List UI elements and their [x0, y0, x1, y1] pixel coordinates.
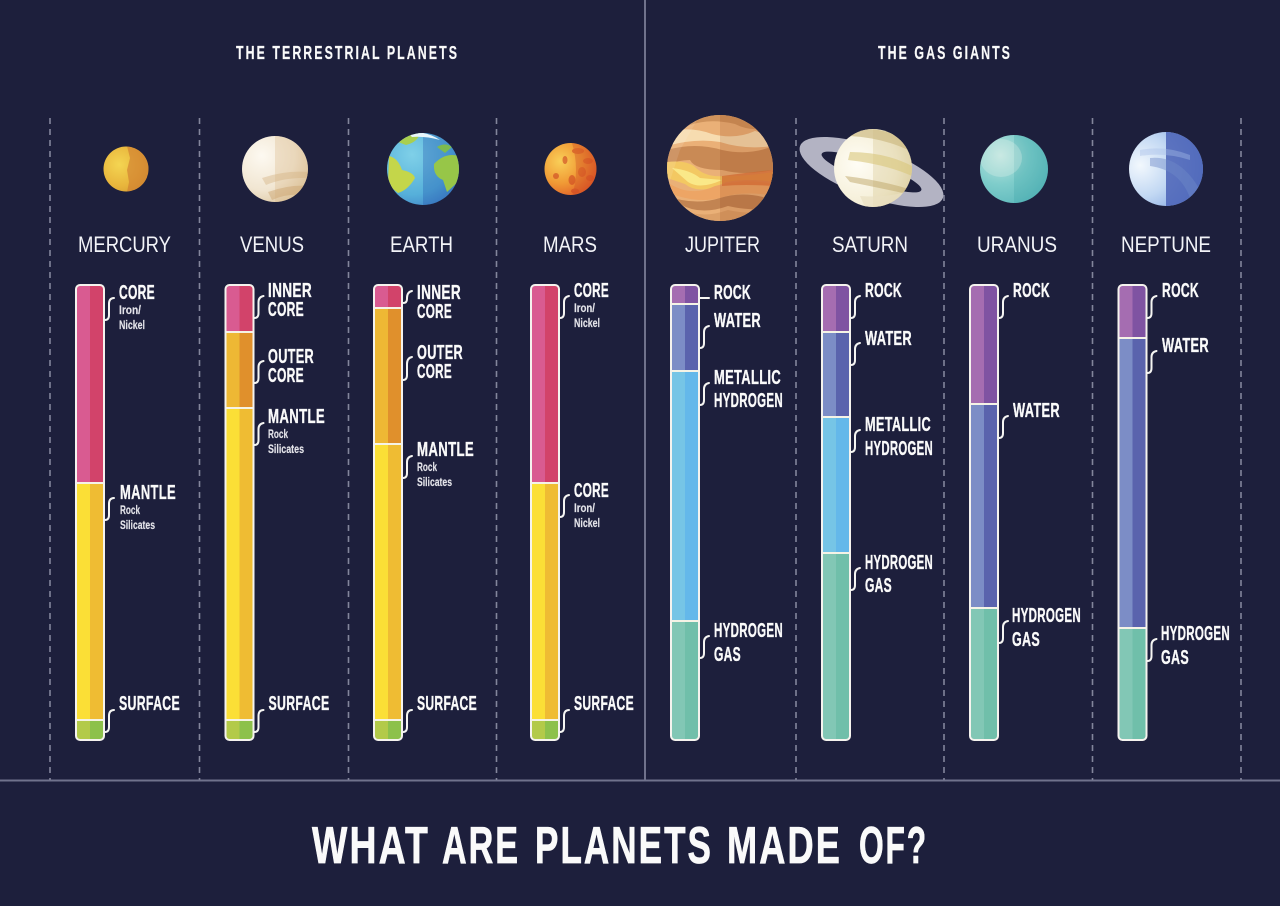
labels: mars: CORE: [574, 480, 609, 502]
labels: saturn: [851, 280, 933, 597]
labels: jupiter: GAS: [714, 644, 741, 666]
labels: saturn: METALLIC: [865, 414, 931, 436]
bar: mars: [530, 284, 560, 741]
labels: jupiter: WATER: [714, 310, 761, 332]
planet name: uranus: URANUS: [977, 232, 1057, 257]
labels: venus: INNER: [268, 280, 312, 302]
labels: mars: SURFACE: [574, 693, 634, 715]
planet name: neptune: NEPTUNE: [1121, 232, 1211, 257]
planet name: mercury: MERCURY: [78, 232, 171, 257]
labels: earth: Rock: [417, 462, 437, 474]
bar: jupiter: [670, 284, 700, 741]
labels: venus: [254, 280, 330, 732]
planet name: saturn: SATURN: [832, 232, 908, 257]
planet name: earth: EARTH: [390, 232, 453, 257]
planet name: mars: MARS: [543, 232, 597, 257]
labels: neptune: GAS: [1161, 647, 1189, 669]
icon: uranus: [980, 135, 1048, 203]
labels: jupiter: [700, 282, 783, 666]
labels: jupiter: ROCK: [714, 282, 751, 304]
labels: saturn: ROCK: [865, 280, 902, 302]
labels: earth: OUTER: [417, 342, 463, 364]
bar: uranus: [969, 284, 999, 741]
labels: mercury: Iron/: [119, 305, 142, 317]
labels: jupiter: HYDROGEN: [714, 620, 783, 642]
icon: earth: [387, 132, 460, 206]
labels: mars: Nickel: [574, 318, 600, 330]
labels: mars: CORE: [574, 280, 609, 302]
labels: mercury: Silicates: [120, 520, 155, 532]
labels: mercury: Nickel: [119, 320, 145, 332]
labels: neptune: [1148, 280, 1230, 669]
labels: earth: [403, 282, 477, 732]
title: WHAT: [312, 817, 430, 875]
labels: uranus: ROCK: [1013, 280, 1050, 302]
icon: saturn: [800, 129, 944, 207]
labels: mars: Iron/: [574, 303, 596, 315]
title: OF?: [859, 817, 928, 875]
labels: venus: Silicates: [268, 444, 304, 456]
bar: neptune: [1118, 284, 1148, 741]
labels: earth: MANTLE: [417, 439, 474, 461]
labels: mars: Nickel: [574, 518, 600, 530]
labels: neptune: WATER: [1162, 335, 1209, 357]
labels: venus: MANTLE: [268, 406, 325, 428]
bar: mercury: [75, 284, 105, 741]
labels: venus: OUTER: [268, 346, 314, 368]
planet name: venus: VENUS: [240, 232, 304, 257]
labels: saturn: HYDROGEN: [865, 552, 933, 574]
labels: mars: Iron/: [574, 503, 596, 515]
labels: uranus: HYDROGEN: [1012, 605, 1081, 627]
frame divider: vertical: [644, 0, 646, 780]
labels: mercury: [105, 282, 180, 732]
labels: mercury: MANTLE: [120, 482, 176, 504]
frame divider: horizontal: [0, 780, 1280, 782]
labels: venus: SURFACE: [268, 693, 330, 715]
labels: mars: [560, 280, 634, 732]
planet name: jupiter: JUPITER: [685, 232, 760, 257]
labels: earth: CORE: [417, 361, 452, 383]
icon: neptune: [1129, 132, 1203, 206]
labels: uranus: WATER: [1013, 400, 1060, 422]
labels: uranus: [999, 280, 1081, 651]
labels: saturn: HYDROGEN: [865, 438, 933, 460]
title: ARE: [442, 817, 520, 875]
bar: saturn: [821, 284, 851, 741]
labels: uranus: GAS: [1012, 629, 1040, 651]
labels: earth: Silicates: [417, 477, 452, 489]
title: [312, 817, 928, 875]
labels: mercury: CORE: [119, 282, 155, 304]
heading: the terrestrial planets: THE TERRESTRIAL PLANETS: [236, 43, 459, 63]
labels: neptune: HYDROGEN: [1161, 623, 1230, 645]
labels: venus: CORE: [268, 299, 304, 321]
icon: venus: [242, 136, 310, 204]
title: MADE: [727, 817, 842, 875]
labels: mercury: Rock: [120, 505, 140, 517]
heading: the gas giants: THE GAS GIANTS: [878, 43, 1012, 63]
labels: venus: Rock: [268, 429, 288, 441]
labels: saturn: WATER: [865, 328, 912, 350]
labels: jupiter: HYDROGEN: [714, 390, 783, 412]
labels: mercury: SURFACE: [119, 693, 180, 715]
labels: venus: CORE: [268, 365, 304, 387]
labels: earth: SURFACE: [417, 693, 477, 715]
bar: venus: [224, 284, 254, 741]
labels: jupiter: METALLIC: [714, 367, 781, 389]
labels: earth: INNER: [417, 282, 461, 304]
labels: neptune: ROCK: [1162, 280, 1199, 302]
title: PLANETS: [535, 817, 713, 875]
labels: saturn: GAS: [865, 575, 892, 597]
icon: mars: [544, 143, 598, 196]
saturn ring: [792, 123, 951, 221]
bar: earth: [373, 284, 403, 741]
icon: mercury: [104, 146, 150, 192]
icon: jupiter: [667, 115, 773, 222]
labels: earth: CORE: [417, 301, 452, 323]
